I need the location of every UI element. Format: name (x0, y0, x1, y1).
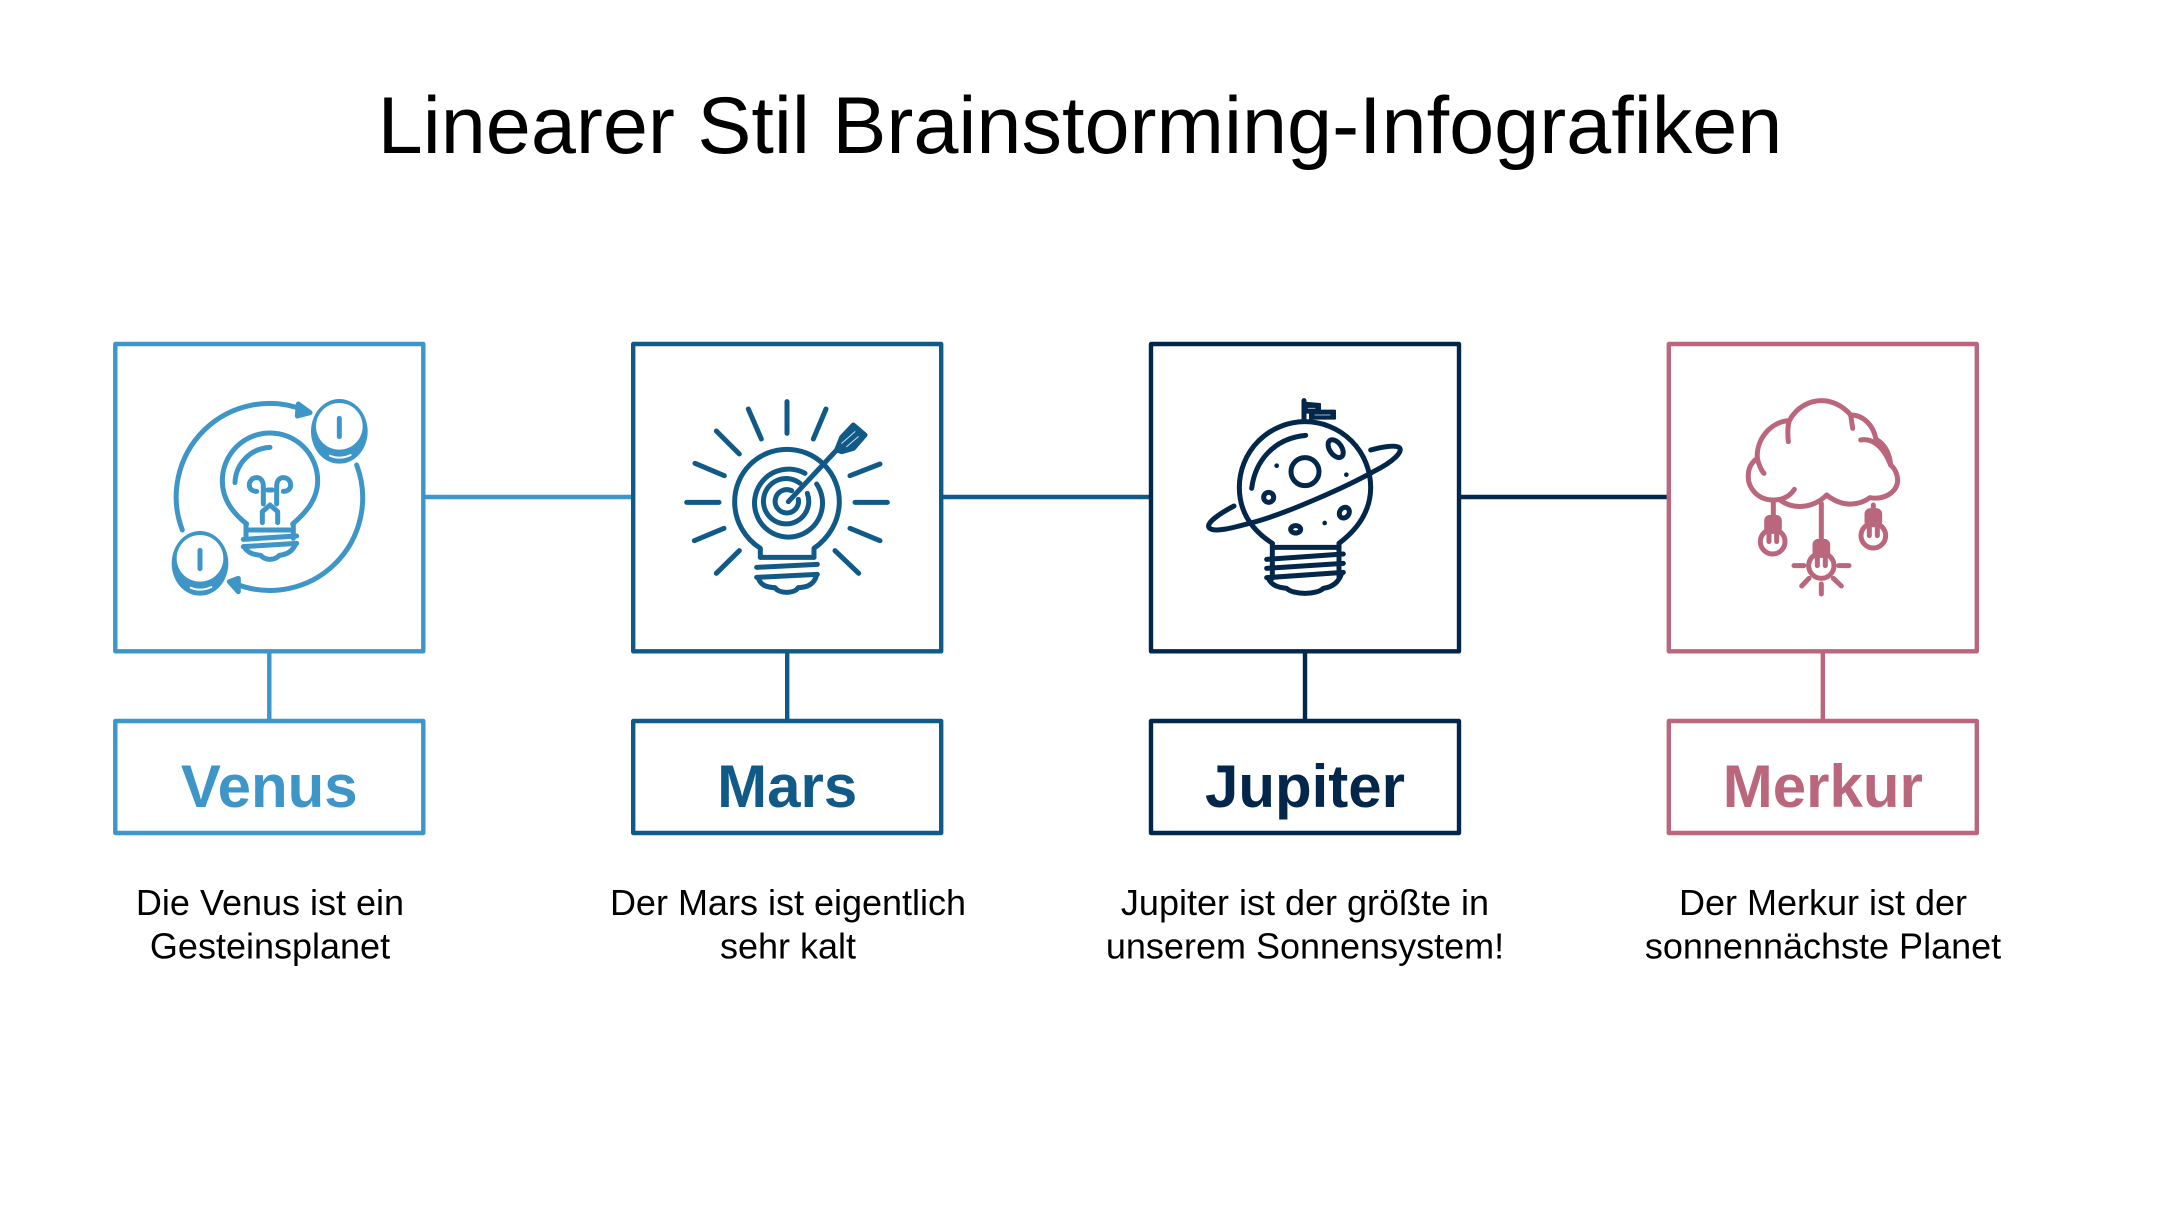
icon box: Venus (115, 344, 423, 651)
panel: Venus (115, 344, 423, 966)
title: Linearer Stil Brainstorming-Infografiken (378, 81, 1782, 171)
description: Mars: sehr kalt (720, 925, 856, 966)
stem: Merkur (1821, 651, 1825, 721)
label box: Mars (633, 721, 941, 833)
icon box: Merkur (1669, 344, 1977, 651)
description: Jupiter: unserem Sonnensystem! (1106, 925, 1504, 966)
label: Mars: Mars (717, 753, 857, 820)
label box: Jupiter (1151, 721, 1459, 833)
icon box: Jupiter (1151, 344, 1459, 651)
connector: Mars to Jupiter (941, 495, 1151, 499)
icon: light bulb with cycle arrows and coins (172, 399, 368, 596)
label: Venus: Venus (181, 753, 358, 820)
label box: Venus (115, 721, 423, 833)
description: Jupiter: Jupiter ist der größte in (1121, 882, 1489, 923)
stem: Venus (267, 651, 271, 721)
icon: cloud with hanging light bulbs (1748, 401, 1898, 594)
stem: Jupiter (1303, 651, 1307, 721)
stem: Mars (785, 651, 789, 721)
panel: Mars (610, 344, 966, 966)
description: Merkur: Der Merkur ist der (1679, 882, 1967, 923)
panel: Merkur (1645, 344, 2001, 966)
connector: Venus to Mars (423, 495, 633, 499)
description: Mars: Der Mars ist eigentlich (610, 882, 966, 923)
description: Merkur: sonnennächste Planet (1645, 925, 2001, 966)
icon box: Mars (633, 344, 941, 651)
icon: planet light bulb with ring and flag (1209, 401, 1400, 593)
description: Venus: Gesteinsplanet (150, 925, 390, 966)
description: Venus: Die Venus ist ein (136, 882, 404, 923)
label: Merkur: Merkur (1723, 753, 1923, 820)
connector: Jupiter to Merkur (1459, 495, 1669, 499)
panel: Jupiter (1106, 344, 1504, 966)
label box: Merkur (1669, 721, 1977, 833)
icon: light bulb with target and arrow (687, 402, 887, 592)
label: Jupiter: Jupiter (1205, 753, 1405, 820)
